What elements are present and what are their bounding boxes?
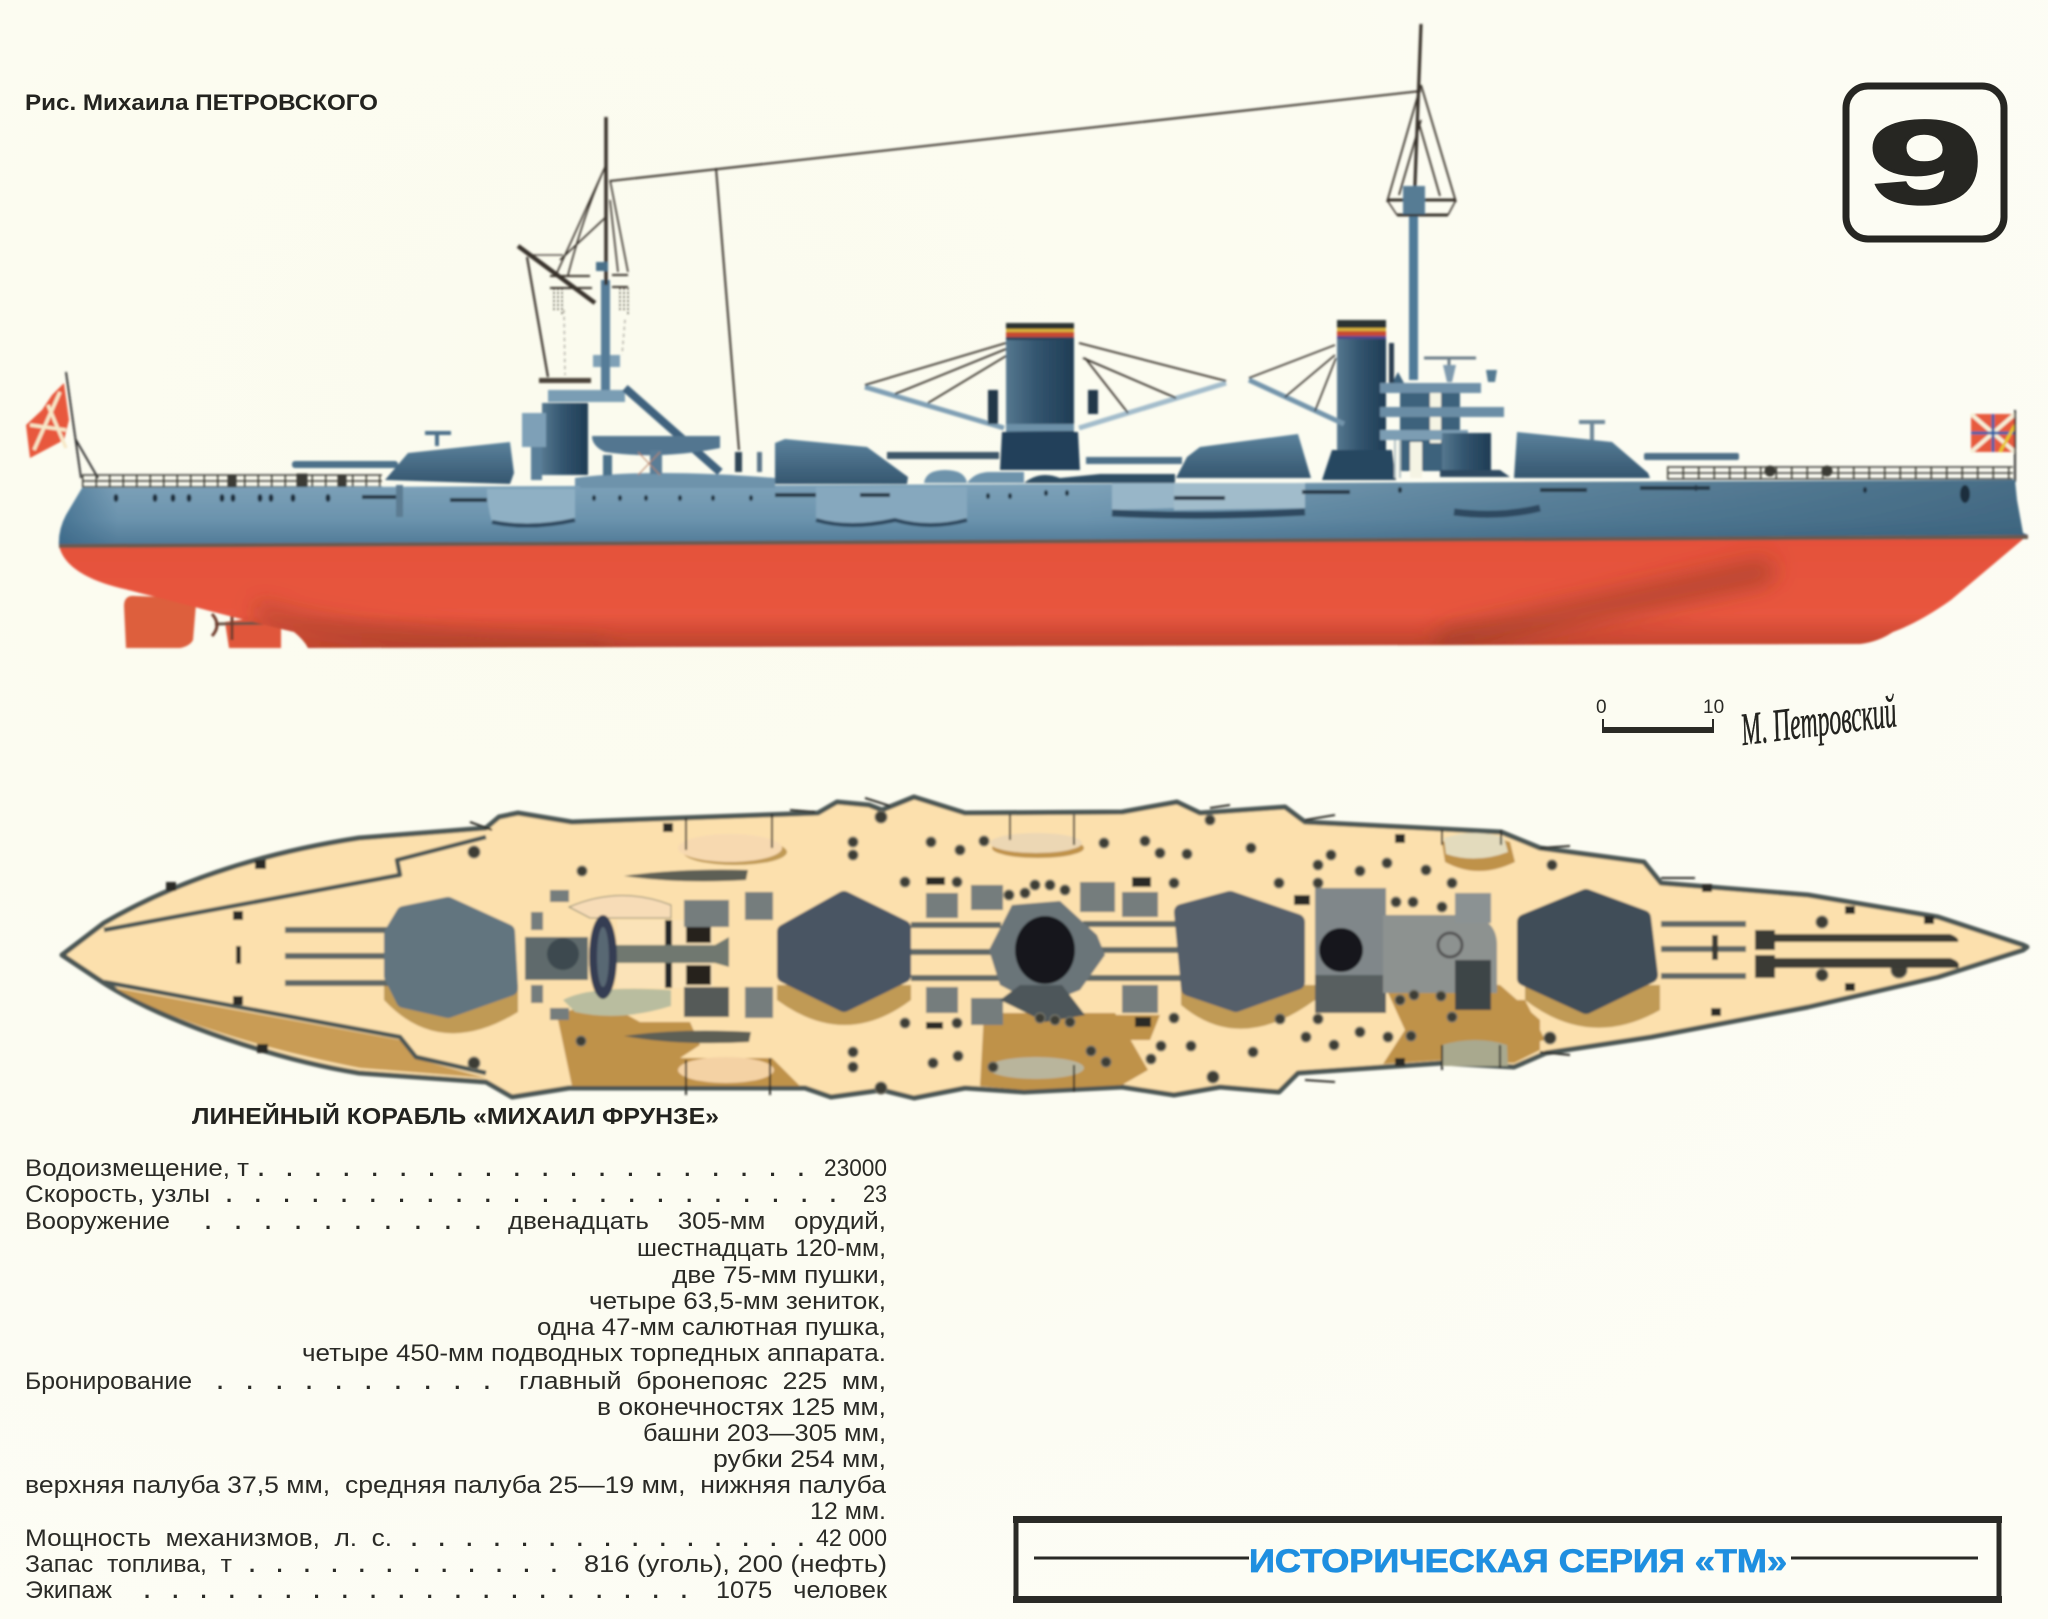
deck bulges: [575, 470, 1175, 486]
aft mast and rigging: [518, 117, 628, 390]
spec: armour: верхняя палуба 37,5 мм, средняя палуба 25—19 мм, нижняя палуба: [25, 1472, 887, 1499]
antenna drop wire: [716, 168, 762, 472]
upper hull bow shade: [59, 480, 2028, 546]
spec: armament: [25, 1208, 886, 1367]
turret 4 plan: [1525, 897, 1650, 1006]
spec: armour: Бронирование: [25, 1368, 192, 1395]
forward funnel boom: [1249, 345, 1344, 424]
dark hatches: [166, 823, 1934, 1066]
spec: fuel: [25, 1551, 887, 1578]
spec: armour: главный бронепояс 225 мм,: [519, 1368, 886, 1395]
spec: displacement: [25, 1155, 887, 1182]
spec: armament: Вооружение: [25, 1208, 170, 1235]
spec: speed: 23: [863, 1181, 887, 1208]
spec: crew: 1075 человек: [716, 1577, 888, 1604]
aft gun turret: [292, 433, 514, 484]
spec: speed: Скорость, узлы: [25, 1181, 210, 1208]
spec: engine power: Мощность механизмов, л. с.: [25, 1525, 392, 1552]
spec: crew: Экипаж: [25, 1577, 112, 1604]
bow flag: [1971, 410, 2015, 482]
spec: engine power: 42 000: [816, 1525, 887, 1552]
spec: fuel: Запас топлива, т: [25, 1551, 232, 1578]
spec: armour: рубки 254 мм,: [713, 1446, 886, 1473]
turret shadows: [384, 985, 1660, 1033]
casemates: [362, 483, 1710, 526]
third gun turret: [1086, 434, 1311, 478]
spec: armour: 12 мм.: [810, 1498, 886, 1525]
series banner: ИСТОРИЧЕСКАЯ СЕРИЯ «ТМ»: [1249, 1543, 1787, 1579]
spec: armour: [25, 1368, 887, 1525]
boats on deck: [678, 833, 1515, 1083]
aft superstructure: [522, 388, 775, 488]
second gun turret: [775, 439, 999, 484]
turret 2 plan: [785, 899, 903, 1004]
badge: issue number 9: [1846, 86, 2004, 239]
forward funnel and bridge plan: [1315, 888, 1497, 1013]
spec: speed: ......................: [226, 1182, 836, 1207]
antenna wire between masts: [610, 91, 1421, 181]
stern flag: [26, 383, 69, 458]
spec: armament: двенадцать 305-мм орудий,: [508, 1208, 886, 1235]
stern flagstaff: [66, 372, 98, 478]
specification table: [25, 1155, 888, 1604]
portholes: [114, 485, 1970, 503]
aft superstructure plan: [525, 895, 729, 1016]
deck bollards and ventilators: [468, 811, 1907, 1094]
scale bar: 0: [1596, 697, 1607, 718]
boat davits: [470, 798, 1695, 1095]
badge: issue number 9: 9: [1868, 96, 1983, 228]
spec: fuel: 816 (уголь), 200 (нефть): [584, 1551, 887, 1578]
spec: armament: ..........: [205, 1209, 481, 1234]
launches: [624, 870, 751, 1043]
spec: displacement: ....................: [258, 1156, 804, 1181]
deck outline: [62, 797, 2027, 1098]
credit line: Рис. Михаила ПЕТРОВСКОГО: [25, 90, 378, 115]
main gun barrels on plan: [285, 921, 1746, 986]
main mast: [1387, 24, 1456, 380]
upper hull: grey-blue freeboard: [59, 480, 2028, 546]
spec: crew: [25, 1577, 888, 1604]
turret 1 plan: [392, 905, 510, 1010]
spec: crew: ....................: [144, 1578, 687, 1603]
tan deck shadows: [115, 982, 1545, 1090]
fourth gun turret: [1514, 422, 1739, 478]
hull shading: [262, 572, 1762, 650]
waterline: [59, 537, 2028, 546]
forward bridge: [1380, 343, 1510, 478]
forward funnel: [1322, 320, 1396, 480]
scale bar: [1596, 697, 1724, 733]
midship funnel right boom: [1079, 343, 1226, 428]
inner stern deck edge: [104, 837, 486, 1073]
ship title: ЛИНЕЙНЫЙ КОРАБЛЬ «МИХАИЛ ФРУНЗЕ»: [192, 1102, 719, 1129]
spec: armament: шестнадцать 120-мм,: [637, 1235, 886, 1262]
artist signature: М. Петровский: [1737, 685, 1899, 755]
midship funnel: [1000, 323, 1080, 470]
deck lockers: [531, 882, 1158, 1025]
midship funnel left boom: [865, 343, 1006, 428]
turret 3 plan: [1182, 899, 1297, 1004]
forecastle anchor gear: [1712, 930, 1959, 978]
stern railing: [82, 474, 382, 488]
spec: armour: ..........: [217, 1369, 490, 1394]
spec: armament: четыре 63,5-мм зениток,: [589, 1288, 886, 1315]
spec: armament: четыре 450-мм подводных торпедных аппарата.: [302, 1340, 886, 1367]
spec: armour: башни 203—305 мм,: [643, 1420, 886, 1447]
bow railing: [1667, 466, 2013, 479]
series banner: [1013, 1516, 2002, 1603]
spec: displacement: 23000: [824, 1155, 887, 1182]
spec: armament: одна 47-мм салютная пушка,: [537, 1314, 886, 1341]
deck plan of the battleship: [62, 797, 2027, 1098]
lower hull: red underwater body: [59, 535, 2028, 648]
spec: armour: в оконечностях 125 мм,: [597, 1394, 886, 1421]
spec: engine power: ...............: [411, 1526, 804, 1551]
spec: engine power: [25, 1525, 887, 1552]
spec: armament: две 75-мм пушки,: [672, 1262, 886, 1289]
spec: speed: [25, 1181, 887, 1208]
side profile of the battleship: [26, 24, 2028, 650]
rudder and propeller: [124, 591, 392, 648]
spec: fuel: ............: [249, 1552, 557, 1577]
scale bar: 10: [1703, 697, 1724, 718]
midship funnel plan: [989, 901, 1105, 1022]
spec: displacement: Водоизмещение, т: [25, 1155, 249, 1182]
